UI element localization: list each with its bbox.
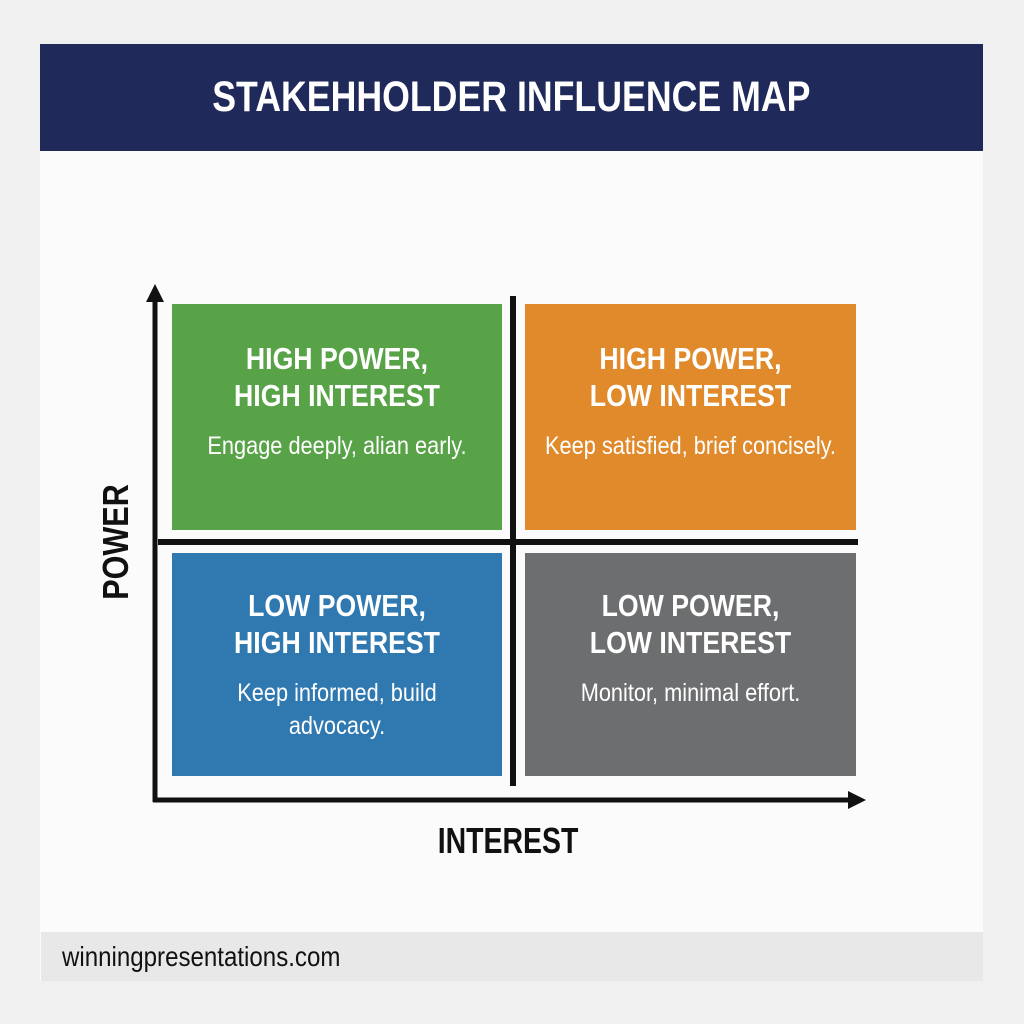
title bar	[40, 44, 983, 151]
quadrant: high power high interest: Engage deeply, alian early.	[207, 432, 467, 460]
quadrant: low power low interest	[525, 553, 856, 776]
title bar: STAKEHHOLDER INFLUENCE MAP	[212, 73, 811, 121]
quadrant: low power high interest: LOW POWER,	[248, 588, 426, 623]
quadrant: high power high interest: HIGH POWER,	[246, 341, 428, 376]
quadrant: high power low interest: HIGH POWER,	[599, 341, 782, 376]
quadrant: low power low interest: LOW POWER,	[602, 588, 779, 623]
quadrant: high power high interest	[172, 304, 502, 530]
quadrant: high power low interest: Keep satisfied, brief concisely.	[545, 432, 836, 460]
quadrant: high power low interest: LOW INTEREST	[590, 378, 791, 413]
footer	[41, 932, 983, 981]
quadrant: low power high interest	[172, 553, 502, 776]
axis label: interest: INTEREST	[438, 820, 578, 861]
quadrant: low power high interest: Keep informed, build	[237, 679, 437, 707]
quadrant: low power high interest: advocacy.	[289, 712, 385, 740]
footer: winningpresentations.com	[62, 941, 340, 972]
quadrant: low power high interest: HIGH INTEREST	[234, 625, 440, 660]
quadrant: low power low interest: Monitor, minimal effort.	[581, 679, 800, 707]
quadrant: high power high interest: HIGH INTEREST	[234, 378, 440, 413]
quadrant: high power low interest	[525, 304, 856, 530]
quadrant: low power low interest: LOW INTEREST	[590, 625, 791, 660]
axis label: power: POWER	[95, 484, 136, 600]
